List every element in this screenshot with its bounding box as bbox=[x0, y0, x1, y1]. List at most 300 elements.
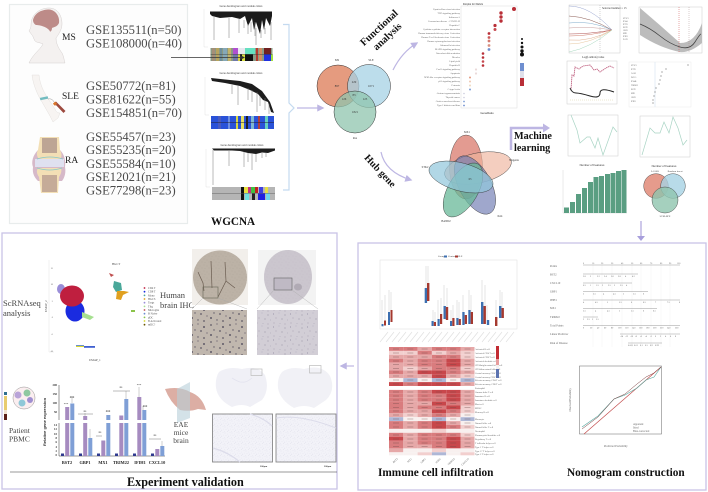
chart: enrichment dot plot: Apoptosis bbox=[450, 72, 460, 75]
chart: UMAP bbox=[44, 260, 162, 362]
chart: nomogram: 2.8 bbox=[583, 276, 587, 278]
chart: nomogram: 5 bbox=[607, 302, 609, 304]
chart: nomogram: 4 bbox=[626, 285, 628, 287]
label: machine learning: learning bbox=[514, 143, 550, 154]
chart: immune box plot: Group bbox=[438, 255, 445, 258]
chart: enrichment dot plot: African trypanosomiasis bbox=[437, 92, 460, 95]
chart: nomogram: 2 bbox=[660, 336, 661, 338]
chart: small venn: SVM-RFE bbox=[660, 215, 671, 218]
image: mouse brain section 2 bbox=[278, 366, 332, 408]
image: IHC crop negative bbox=[257, 310, 318, 355]
chart: correlation heatmap: MDSC bbox=[475, 408, 482, 410]
chart: lasso coefficient paths: BST2 bbox=[623, 27, 628, 29]
chart: three-set venn bbox=[317, 58, 390, 140]
chart: relative gene expression bars: ns bbox=[84, 409, 87, 413]
arrow: down to nomogram panel bbox=[640, 221, 642, 238]
chart: enrichment dot plot: Dotplot for KEGG bbox=[463, 2, 483, 6]
chart: correlation heatmap: Activated dendritic cell bbox=[475, 360, 497, 363]
chart: lasso coefficient paths: Log(Lambda) value bbox=[582, 56, 605, 59]
chart: nomogram: 3.5 bbox=[620, 285, 624, 287]
heatmap column labels bbox=[392, 457, 470, 466]
lines: zoom callout negative bbox=[257, 290, 318, 309]
chart: SVM accuracy: Number of Features bbox=[652, 164, 677, 168]
chart: lasso coefficient paths: GBP1 bbox=[623, 30, 628, 32]
chart: relative gene expression bars: 50 bbox=[54, 410, 58, 414]
scale bar text: 200μm bbox=[260, 465, 268, 468]
arrowhead bbox=[637, 236, 645, 241]
chart: five-set venn bbox=[422, 131, 520, 223]
chart: enrichment dot plot: Human T-cell leukemia virus 1 infection bbox=[421, 36, 461, 39]
chart: nomogram: GBP1 bbox=[550, 290, 557, 294]
chart: enrichment dot plot: Cytokine-cytokine receptor interaction bbox=[423, 28, 461, 31]
chart: nomogram: 10 bbox=[592, 263, 595, 265]
chart: calibration curve: Bias-corrected bbox=[633, 430, 650, 433]
chart: nomogram: 3.6 bbox=[611, 276, 615, 278]
chart: nomogram: 160 bbox=[639, 328, 643, 330]
icon: arm with blood tube bbox=[32, 75, 66, 122]
chart: enrichment dot plot: NOD-like receptor signaling pathway bbox=[424, 76, 461, 79]
arrow: machine learning bbox=[511, 128, 546, 150]
chart: nomogram: 8 bbox=[675, 336, 677, 338]
chart: gene importance bbox=[629, 62, 691, 107]
chart: correlation heatmap: Memory B cell bbox=[475, 412, 489, 414]
chart: five-set venn: Magenta bbox=[509, 159, 520, 162]
chart: enrichment dot plot: Human immunodeficiency virus 1 infection bbox=[418, 32, 461, 35]
chart: relative gene expression bars: 0 bbox=[56, 453, 58, 457]
chart: five-set venn: IGK bbox=[498, 215, 502, 218]
chart: nomogram: 5.5 bbox=[633, 294, 637, 296]
chart: nomogram: 6 bbox=[631, 302, 633, 304]
chart: enrichment dot plot: Human cytomegalovirus infection bbox=[427, 40, 461, 43]
chart: nomogram: 4.5 bbox=[607, 310, 611, 312]
chart: UMAP: -5 bbox=[51, 333, 54, 336]
chart: enrichment dot plot: GeneRatio bbox=[480, 111, 494, 115]
chart: UMAP: HGCT bbox=[112, 262, 120, 266]
chart: correlation heatmap bbox=[389, 346, 503, 466]
chart: nomogram: 5 bbox=[619, 310, 621, 312]
chart: gene importance: IFIH1 bbox=[631, 101, 636, 103]
chart: five-set venn: MX1 bbox=[464, 131, 471, 134]
chart: calibration curve bbox=[569, 366, 662, 448]
label: functional analysis bbox=[358, 8, 409, 57]
chart: correlation heatmap: Plasmacytoid dendritic cell bbox=[475, 435, 500, 437]
label: human brain IHC: brain IHC bbox=[160, 300, 195, 310]
chart: relative gene expression bars: 10 bbox=[54, 432, 58, 436]
legend: cell types: pDC bbox=[148, 316, 153, 319]
chart: gene importance: STAT1 bbox=[631, 64, 637, 67]
label: MS: MS bbox=[62, 33, 76, 43]
chart: nomogram: 260 bbox=[675, 328, 679, 330]
chart: nomogram: 0.01 bbox=[634, 345, 638, 347]
chart: nomogram: -2 bbox=[650, 336, 652, 338]
chart: nomogram: 50 bbox=[631, 263, 634, 265]
chart: gene importance: BST2 bbox=[631, 89, 636, 91]
chart: relative gene expression bars: ns bbox=[154, 433, 157, 437]
heading: nomogram construction: Nomogram construction bbox=[567, 467, 685, 479]
chart: nomogram: 2.5 bbox=[608, 285, 612, 287]
chart: relative gene expression bars: GBP1 bbox=[80, 460, 90, 465]
chart: relative gene expression bars: TRIM22 bbox=[113, 460, 129, 465]
chart: nomogram: -12 bbox=[625, 336, 628, 338]
chart: enrichment dot plot: FoxO signaling pathway bbox=[436, 68, 461, 71]
chart: nomogram: Risk of Disease bbox=[550, 342, 568, 345]
text: MS datasets: GSE135511(n=50) bbox=[86, 23, 182, 37]
chart: enrichment dot plot: Pertussis bbox=[451, 84, 460, 87]
chart: correlation heatmap: Central memory CD8 T cell bbox=[475, 377, 501, 379]
icon: head with brain bbox=[29, 8, 65, 63]
chart: gene importance: GBP1 bbox=[631, 97, 636, 99]
chart: correlation heatmap: Monocyte bbox=[475, 419, 484, 421]
chart: nomogram: 5.5 bbox=[619, 302, 623, 304]
chart: lasso coefficient paths: IFIH1 bbox=[623, 36, 628, 38]
label: machine learning bbox=[514, 131, 552, 154]
chart: nomogram: MX1 bbox=[550, 307, 557, 310]
chart: UMAP: -10 bbox=[50, 350, 54, 353]
chart: correlation heatmap: Regulatory T cell bbox=[475, 438, 491, 441]
chart: nomogram: 4.5 bbox=[595, 302, 599, 304]
arrow: to venn bbox=[297, 107, 323, 109]
label: EAE mice brain: EAE bbox=[174, 420, 189, 429]
chart: enrichment dot plot: Lipid yield bbox=[449, 60, 461, 63]
chart: nomogram: 80 bbox=[611, 328, 614, 330]
chart: nomogram: 0.001 bbox=[628, 345, 633, 347]
heatmap column labels: IFIH1 bbox=[435, 457, 442, 464]
chart: nomogram: 0 bbox=[583, 328, 585, 330]
chart: enrichment dot plot: Thyroid cancer bbox=[445, 96, 460, 99]
chart: nomogram: 7 bbox=[655, 302, 657, 304]
chart: gene importance: MX1 bbox=[631, 93, 635, 95]
chart: nomogram: 2 bbox=[583, 319, 584, 321]
chart: correlation heatmap: Activated B cell bbox=[475, 348, 490, 351]
legend: cell types: Microglia bbox=[148, 309, 160, 312]
chart: nomogram: 0.99 bbox=[655, 345, 659, 347]
chart: UMAP: 15 bbox=[51, 267, 54, 270]
image: mouse brain crop 1 bbox=[212, 414, 272, 462]
chart: enrichment dot plot: p53 signaling pathway bbox=[438, 80, 461, 83]
icon: PBMC cells bbox=[13, 387, 35, 409]
chart: nomogram: 3.5 bbox=[593, 294, 597, 296]
text: RA datasets: GSE12021(n=21) bbox=[86, 170, 176, 184]
chart: lasso coefficient paths: XAF1 bbox=[623, 38, 628, 41]
legend: cell types: B Activated bbox=[148, 320, 162, 323]
chart: nomogram: 3.8 bbox=[618, 276, 622, 278]
chart: relative gene expression bars: *** bbox=[64, 402, 69, 406]
chart: nomogram: 100 bbox=[677, 263, 681, 265]
chart: relative gene expression bars: 12 bbox=[54, 427, 58, 431]
arrow: dataset to WGCNA bbox=[171, 56, 244, 58]
chart: correlation heatmap: Effector memory CD4 T cell bbox=[475, 379, 502, 382]
chart: gene importance: IFIT3 bbox=[631, 69, 636, 71]
chart: nomogram: 4 bbox=[595, 310, 597, 312]
legend: heatmap colour scale bbox=[496, 346, 499, 378]
label: EAE mice brain: mice bbox=[174, 428, 189, 437]
icon: EAE mouse brain bbox=[165, 382, 206, 423]
chart: nomogram: 140 bbox=[632, 328, 636, 330]
chart: correlation heatmap: CD56dim natural killer cell bbox=[475, 369, 501, 371]
image: IHC section positive bbox=[192, 249, 248, 305]
chart: relative gene expression bars: ### bbox=[143, 404, 148, 408]
chart: nomogram: 100 bbox=[618, 328, 622, 330]
chart: enrichment dot plot: C-type lectin bbox=[448, 88, 461, 91]
chart: nomogram bbox=[550, 263, 681, 347]
chart: nomogram: 3.5 bbox=[583, 310, 587, 312]
panel: immune and nomogram bbox=[358, 243, 706, 490]
chart: nomogram: 4.2 bbox=[632, 276, 635, 278]
chart: enrichment dot plot: Type I diabetes mellitus bbox=[437, 104, 460, 107]
label: scRNAseq analysis: ScRNAseq bbox=[3, 298, 42, 308]
chart: SVM error bbox=[568, 115, 618, 167]
chart: nomogram: 6.5 bbox=[643, 302, 647, 304]
label: patient PBMC: Patient bbox=[9, 426, 31, 435]
chart: small venn: Random forest bbox=[668, 170, 683, 173]
chart: nomogram: Linear Predictor bbox=[550, 333, 568, 336]
chart: lasso coefficient paths: IFIT1 bbox=[623, 24, 628, 26]
chart: nomogram: 30 bbox=[611, 263, 614, 265]
chart: nomogram: 0.9 bbox=[650, 345, 653, 347]
chart: dendrogram MS bbox=[204, 4, 273, 61]
text: MS datasets: GSE108000(n=40) bbox=[86, 36, 182, 50]
chart: nomogram: 200 bbox=[653, 328, 657, 330]
chart: dendrogram RA bbox=[206, 143, 275, 200]
chart: immune box plot: Control bbox=[448, 255, 456, 258]
chart: dendrogram SLE: Gene dendrogram and module colors bbox=[220, 71, 263, 75]
chart: nomogram: 1 bbox=[590, 285, 591, 287]
lines: zoom callout positive bbox=[192, 298, 247, 309]
chart: nomogram: -4 bbox=[645, 336, 648, 338]
arrow head bbox=[240, 55, 245, 60]
text: SLE datasets: GSE81622(n=55) bbox=[86, 92, 176, 106]
image: IHC crop positive bbox=[192, 310, 247, 355]
chart: relative gene expression bars: ### bbox=[106, 409, 111, 413]
chart: lasso coefficient paths: Selected number = 15 bbox=[602, 7, 627, 10]
panel: experiment validation bbox=[2, 233, 337, 489]
chart: gene importance: IFI44L bbox=[631, 81, 637, 83]
chart: three-set venn: 229 bbox=[352, 80, 357, 84]
chart: nomogram: 3.4 bbox=[604, 276, 608, 278]
chart: five-set venn: STK2 bbox=[422, 166, 429, 169]
chart: nomogram: 4 bbox=[603, 294, 605, 296]
label: EAE mice brain: brain bbox=[173, 436, 189, 445]
chart: nomogram: 4 bbox=[665, 336, 667, 338]
chart: nomogram: 3.5 bbox=[596, 319, 600, 321]
label: human brain IHC: Human bbox=[160, 290, 186, 300]
chart: enrichment dot plot: Hepatitis B bbox=[449, 64, 460, 67]
chart: correlation heatmap: Natural killer T cell bbox=[475, 427, 493, 429]
chart: nomogram: 80 bbox=[660, 263, 663, 265]
chart: nomogram: IFIH1 bbox=[550, 299, 557, 302]
chart: three-set venn: 126 bbox=[342, 97, 347, 101]
image: mouse brain crop 2 bbox=[276, 414, 336, 462]
chart: calibration curve: Predicted Probability bbox=[604, 445, 628, 448]
chart: correlation heatmap: T follicular helper cell bbox=[475, 442, 496, 445]
chart: three-set venn: MS bbox=[335, 58, 339, 62]
chart: nomogram: -10 bbox=[630, 336, 634, 338]
chart: correlation heatmap: Immature dendritic cell bbox=[475, 400, 497, 402]
chart: nomogram: 220 bbox=[660, 328, 664, 330]
chart: nomogram: 4 bbox=[583, 302, 585, 304]
chart: nomogram: 8 bbox=[679, 302, 681, 304]
chart: nomogram: 180 bbox=[646, 328, 650, 330]
legend: colour scale bbox=[520, 63, 524, 86]
chart: correlation heatmap: Gamma delta T cell bbox=[475, 392, 493, 394]
label: functional analysis: analysis bbox=[371, 21, 404, 53]
chart: calibration curve: Apparent bbox=[633, 423, 644, 426]
arrow: nomogram panel to validation bbox=[341, 365, 354, 367]
chart: correlation heatmap: Neutrophil bbox=[475, 431, 485, 433]
chart: nomogram: 240 bbox=[667, 328, 671, 330]
chart: nomogram: -8 bbox=[635, 336, 638, 338]
text: RA datasets: GSE55584(n=10) bbox=[86, 157, 176, 171]
chart: nomogram: 1.5 bbox=[596, 285, 600, 287]
bracket bbox=[283, 24, 294, 190]
chart: nomogram: Total Points bbox=[550, 324, 563, 328]
chart: relative gene expression bars: MX1 bbox=[98, 460, 108, 465]
label: human brain IHC bbox=[160, 290, 195, 310]
heatmap column labels: BST2 bbox=[392, 457, 399, 464]
heading: experiment validation: Experiment validation bbox=[127, 475, 244, 489]
chart: UMAP: UMAP_1 bbox=[89, 358, 101, 362]
chart: correlation heatmap: Type 17 T helper cell bbox=[475, 451, 495, 453]
arrow: hub gene bbox=[381, 152, 411, 180]
chart: immune box plot bbox=[380, 255, 517, 342]
legend: cell types: mDC? bbox=[148, 324, 156, 327]
chart: relative gene expression bars: 200 bbox=[52, 383, 58, 387]
heading: WGCNA: WGCNA bbox=[211, 216, 255, 228]
chart: gene importance: OAS3 bbox=[631, 72, 636, 75]
chart: nomogram: 6 bbox=[670, 336, 672, 338]
chart: five-set venn: BAND2 bbox=[441, 220, 451, 223]
chart: relative gene expression bars: 8 bbox=[56, 436, 58, 440]
chart: nomogram: 3 bbox=[590, 276, 592, 278]
chart: nomogram: 90 bbox=[669, 263, 672, 265]
chart: lasso coefficient paths bbox=[569, 5, 629, 59]
legend: cell types: HGCS bbox=[148, 298, 156, 301]
chart: nomogram: BST2 bbox=[550, 274, 557, 276]
chart: three-set venn: 1071 bbox=[368, 84, 374, 88]
legend: cell types: Tregs bbox=[148, 302, 154, 305]
chart: three-set venn: 83 bbox=[352, 93, 356, 97]
chart: relative gene expression bars bbox=[42, 383, 165, 465]
label: hub gene: Hub gene bbox=[362, 153, 398, 190]
chart: enrichment dot plot: TNF signaling pathway bbox=[437, 12, 461, 15]
chart: UMAP: UMAP_2 bbox=[44, 300, 48, 312]
chart: correlation heatmap: CD56bright natural killer cell bbox=[475, 364, 503, 367]
label: machine learning: Machine bbox=[514, 131, 552, 142]
chart: three-set venn: RA bbox=[353, 136, 358, 140]
label: scRNAseq analysis: analysis bbox=[3, 308, 30, 318]
chart: gene importance: ISG15 bbox=[631, 77, 636, 79]
chart: lasso coefficient paths: MX1 bbox=[623, 33, 627, 35]
label: patient PBMC bbox=[9, 426, 31, 444]
text: RA datasets: GSE55235(n=20) bbox=[86, 143, 176, 157]
chart: three-set venn: SLE bbox=[368, 58, 374, 62]
chart: enrichment dot plot: Coronavirus disease - COVID-19 bbox=[428, 20, 461, 23]
chart: nomogram: 3 bbox=[614, 285, 616, 287]
heatmap column labels: GBP1 bbox=[420, 457, 427, 464]
chart: UMAP: 10 bbox=[51, 283, 54, 286]
legend: cell types: CD4 T bbox=[148, 287, 156, 290]
chart: relative gene expression bars: *** bbox=[137, 383, 142, 387]
chart: nomogram: 0 bbox=[655, 336, 657, 338]
chart: enrichment dot plot: Influenza A bbox=[449, 16, 460, 19]
legend: cell types: Tfrg bbox=[148, 305, 154, 308]
arrow: functional analysis bbox=[393, 43, 417, 70]
chart: relative gene expression bars: IFIH1 bbox=[134, 460, 146, 465]
chart: enrichment dot plot: Salmonella infection bbox=[440, 44, 461, 47]
chart: relative gene expression bars: 4 bbox=[56, 445, 58, 449]
label: scRNAseq analysis bbox=[3, 298, 42, 318]
chart: three-set venn: 897 bbox=[335, 84, 340, 88]
chart: SVM accuracy bbox=[640, 116, 690, 168]
heatmap column labels: TRIM22 bbox=[447, 457, 456, 466]
chart: nomogram: 60 bbox=[640, 263, 643, 265]
chart: dendrogram SLE bbox=[205, 71, 274, 129]
chart: relative gene expression bars: 150 bbox=[52, 392, 58, 396]
chart: nomogram: 40 bbox=[621, 263, 624, 265]
chart: relative gene expression bars: CXCL10 bbox=[149, 460, 165, 465]
chart: nomogram: 2 bbox=[602, 285, 603, 287]
text: RA datasets bbox=[86, 130, 176, 198]
chart: nomogram: 6 bbox=[643, 294, 645, 296]
text: SLE datasets: GSE154851(n=70) bbox=[86, 106, 182, 120]
legend: cell types: Mono bbox=[148, 294, 155, 297]
chart: SVM error: Number of Features bbox=[580, 163, 605, 167]
chart: nomogram: 0 bbox=[583, 263, 585, 265]
heading: immune cell infiltration: Immune cell infiltration bbox=[378, 467, 494, 479]
label: RA: RA bbox=[65, 156, 78, 166]
chart: correlation heatmap: Type 2 T helper cell bbox=[475, 454, 494, 456]
chart: nomogram: TRIM22 bbox=[550, 316, 560, 319]
chart: correlation heatmap: Mast cell bbox=[475, 404, 484, 406]
chart: enrichment dot plot: Graft-versus-host disease bbox=[436, 100, 460, 103]
chart: correlation heatmap: Immature B cell bbox=[475, 396, 490, 398]
chart: dendrogram MS: Gene dendrogram and module colors bbox=[220, 4, 263, 8]
chart: nomogram: 6.5 bbox=[653, 310, 657, 312]
chart: nomogram: 5.5 bbox=[631, 310, 635, 312]
chart: relative gene expression bars: 2 bbox=[56, 449, 58, 453]
chart: enrichment dot plot: Measles bbox=[452, 56, 460, 59]
chart: nomogram: 2.5 bbox=[587, 319, 591, 321]
chart: nomogram: 5 bbox=[623, 294, 625, 296]
chart: three-set venn: 125 bbox=[363, 97, 368, 101]
chart: nomogram: 0.5 bbox=[583, 285, 587, 287]
chart: nomogram: 7.5 bbox=[667, 302, 671, 304]
chart: correlation heatmap: Activated CD8 T cell bbox=[475, 356, 495, 359]
chart: nomogram: 4.5 bbox=[613, 294, 617, 296]
chart: nomogram: -6 bbox=[640, 336, 643, 338]
text: RA datasets: GSE77298(n=23) bbox=[86, 184, 176, 198]
image: mouse brain section 1 bbox=[216, 368, 267, 407]
chart: relative gene expression bars: 100 bbox=[52, 401, 58, 405]
chart: lasso coefficient paths: IFI44 bbox=[623, 21, 627, 23]
chart: green bars bbox=[563, 170, 627, 213]
chart: random forest error bbox=[567, 61, 617, 104]
chart: relative gene expression bars: 14 bbox=[54, 423, 58, 427]
chart: nomogram: 0.1 bbox=[640, 345, 643, 347]
chart: nomogram: 6 bbox=[643, 310, 645, 312]
legend: cell types: CD8 T bbox=[148, 291, 156, 294]
chart: nomogram: 3 bbox=[583, 294, 585, 296]
icon: PBMC tube bbox=[4, 392, 7, 420]
panel: datasets bbox=[10, 4, 188, 224]
chart: nomogram: 20 bbox=[601, 263, 604, 265]
chart: nomogram: CXCL10 bbox=[550, 282, 561, 285]
chart: nomogram: 70 bbox=[650, 263, 653, 265]
chart: nomogram: 20 bbox=[590, 328, 593, 330]
chart: nomogram: 120 bbox=[625, 328, 629, 330]
chart: three-set venn: 1821 bbox=[352, 110, 358, 114]
chart: lasso cross-validation bbox=[639, 7, 702, 53]
